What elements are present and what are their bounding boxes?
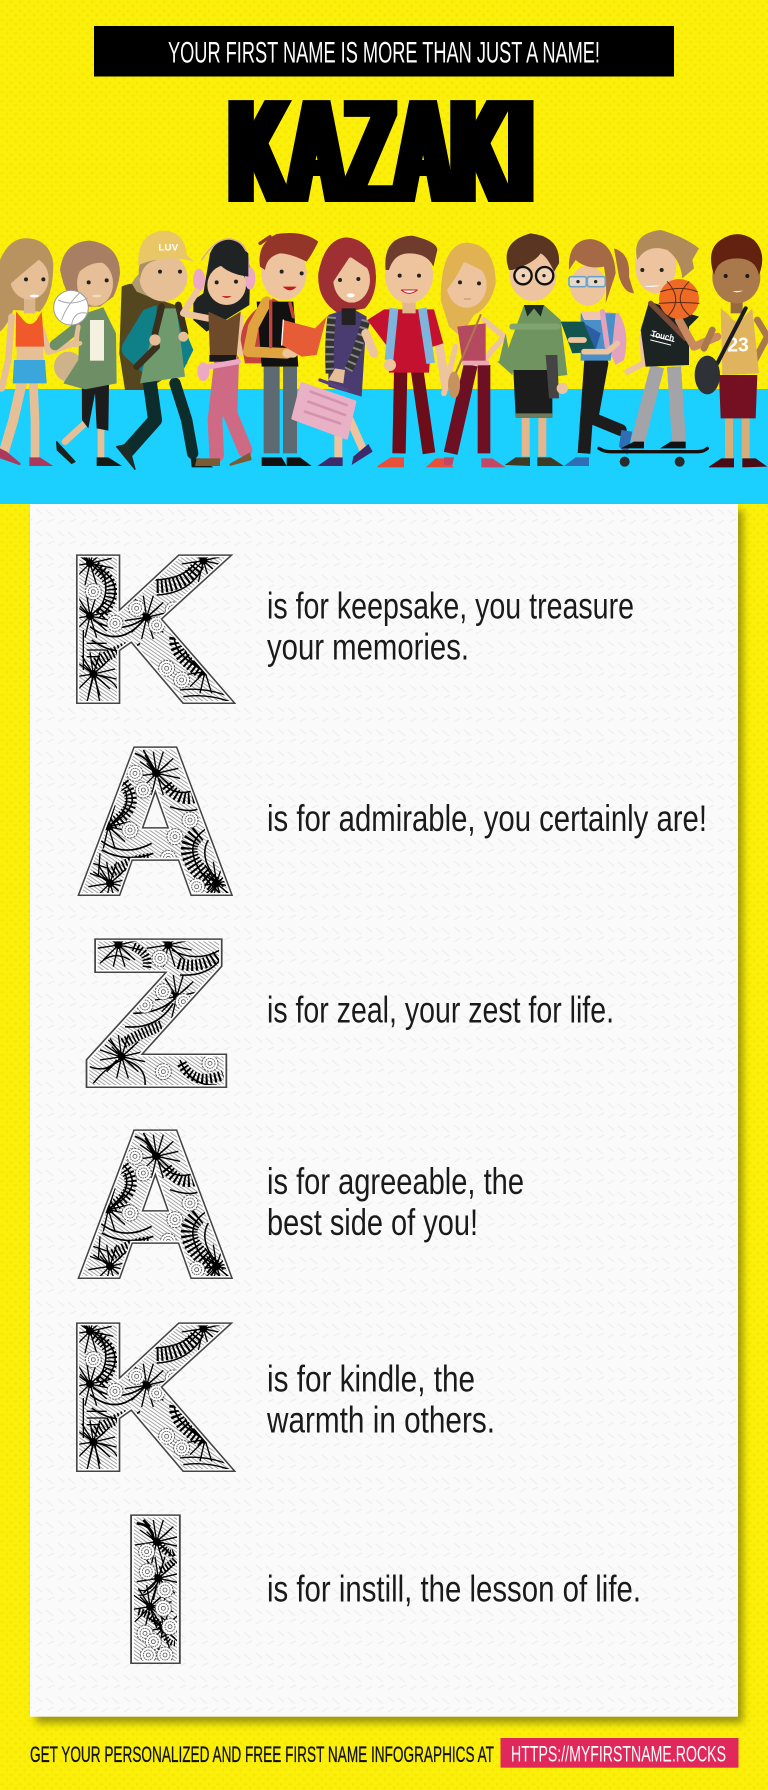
icon: ornamental letter I	[130, 1514, 181, 1664]
icon: ornamental letter A: A	[81, 1093, 230, 1316]
icon: ornamental letter Z	[86, 938, 228, 1088]
icon: ornamental letter K: K	[68, 1286, 225, 1509]
title: name: KAZAKI	[230, 69, 532, 234]
person 3: hiker with backpack: LUV	[158, 243, 179, 253]
person 9: boy with glasses	[497, 233, 568, 466]
icon: ornamental letter K: K	[68, 518, 225, 741]
person 5: boy reading orange book	[241, 233, 327, 466]
person 11: skater with basketball	[599, 230, 717, 467]
icon: ornamental letter A: A	[81, 1093, 230, 1316]
person 7: boy in red shirt	[366, 236, 454, 467]
blue floor band	[0, 389, 768, 504]
text: keepsake: is for keepsake, you treasure	[267, 585, 634, 626]
person 4: girl with headphones	[183, 238, 255, 466]
icon: ornamental letter A: A	[81, 710, 230, 933]
icon: ornamental letter I: I	[121, 1477, 190, 1701]
icon: ornamental letter K	[76, 554, 236, 704]
panel: letters	[30, 504, 743, 1723]
icon: ornamental letter A	[77, 1129, 234, 1279]
person 12: curly-haired boy with shoulder bag: 23	[727, 334, 749, 357]
row 3: letter Z	[86, 938, 612, 1088]
person 2: girl with volleyball	[54, 241, 122, 466]
icon: ornamental letter Z: Z	[86, 901, 227, 1125]
person 6: red-haired girl with pink bag	[293, 237, 376, 466]
row 2: letter A	[77, 746, 704, 896]
icon: ornamental letter I: I	[121, 1477, 190, 1701]
icon: ornamental letter A: A	[81, 710, 230, 933]
text: instill: is for instill, the lesson of life.	[267, 1569, 641, 1610]
row 4: letter A	[77, 1129, 523, 1279]
text: keepsake: your memories.	[267, 626, 469, 667]
person 12: curly-haired boy with shoulder bag	[695, 234, 767, 467]
icon: ornamental letter K	[76, 1322, 236, 1472]
person 3: hiker with backpack	[117, 231, 213, 469]
person 1: girl in orange top	[0, 238, 78, 466]
row 5: letter K	[76, 1322, 492, 1472]
illustration: right group of people	[366, 230, 767, 467]
text: agreeable: best side of you!	[267, 1202, 478, 1243]
text: agreeable: is for agreeable, the	[267, 1161, 524, 1202]
icon: ornamental letter A	[77, 746, 234, 896]
icon: ornamental letter Z: Z	[86, 901, 227, 1125]
row 1: letter K	[76, 554, 633, 704]
text: kindle: is for kindle, the	[267, 1359, 475, 1400]
icon: ornamental letter K: K	[68, 518, 225, 741]
person 10: girl with ponytail and tablet	[561, 239, 634, 466]
text: zeal: is for zeal, your zest for life.	[267, 990, 614, 1031]
icon: ornamental letter K: K	[68, 1286, 225, 1509]
row 6: letter I	[130, 1514, 638, 1664]
header banner	[94, 26, 674, 76]
text: kindle: warmth in others.	[266, 1400, 495, 1441]
person 11: skater with basketball: Touch	[650, 329, 675, 344]
person 8: blonde girl	[441, 243, 506, 467]
illustration: left group of people	[0, 231, 376, 469]
